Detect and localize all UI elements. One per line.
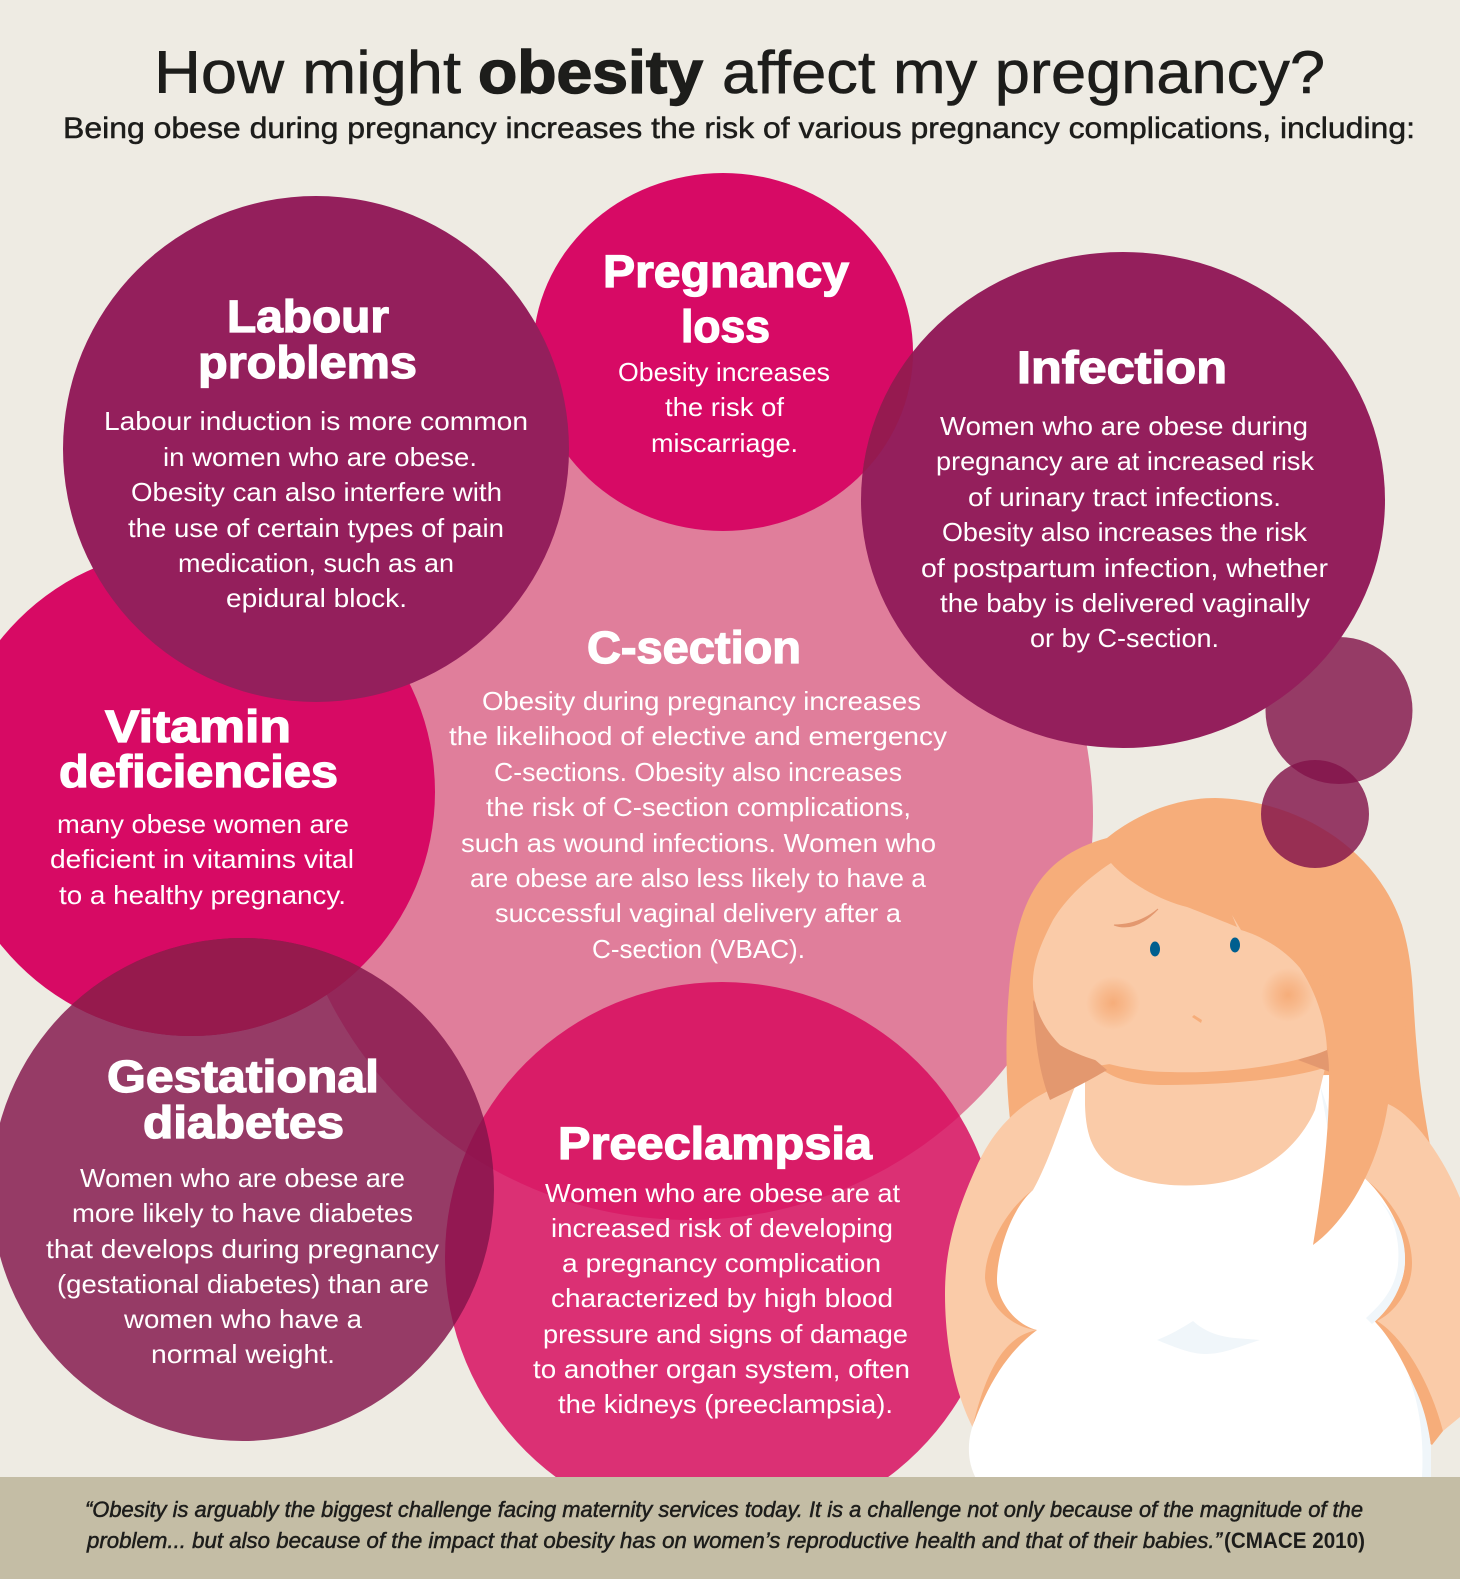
- footer quote: (CMACE 2010): [1224, 1528, 1365, 1553]
- panel: C-section: Obesity during pregnancy increases: [482, 686, 921, 716]
- panel: Gestational diabetes: women who have a: [123, 1304, 363, 1334]
- left arm: [945, 1079, 1100, 1432]
- hair back: [1006, 798, 1430, 1200]
- panel: Preeclampsia: Women who are obese are at: [545, 1178, 901, 1208]
- panel: C-section: successful vaginal delivery after a: [495, 898, 902, 928]
- panel: Gestational diabetes: Women who are obese are: [80, 1163, 405, 1193]
- title: How might: [154, 39, 461, 106]
- panel: Vitamin deficiencies: [0, 548, 435, 1036]
- panel: Pregnancy loss: Pregnancy: [603, 246, 849, 297]
- panel: Preeclampsia: to another organ system, often: [533, 1354, 910, 1384]
- panel: Labour problems: Obesity can also interfere with: [131, 477, 502, 507]
- panel: Labour problems: Labour induction is more common: [104, 406, 528, 436]
- panel: Gestational diabetes: diabetes: [143, 1097, 344, 1148]
- panel: Vitamin deficiencies: many obese women are: [57, 809, 349, 839]
- eye left: [1150, 942, 1160, 956]
- panel: Labour problems: Labour: [227, 291, 389, 342]
- panel: Infection: Infection: [1017, 342, 1227, 393]
- panel: Vitamin deficiencies: to a healthy pregnancy.: [59, 880, 346, 910]
- panel: C-section: are obese are also less likely to have a: [470, 863, 927, 893]
- panel: Infection: pregnancy are at increased risk: [936, 446, 1315, 476]
- panel: Gestational diabetes: that develops during pregnancy: [46, 1234, 439, 1264]
- panel: Preeclampsia: Preeclampsia: [558, 1118, 873, 1169]
- title: [154, 39, 1325, 106]
- panel: Labour problems: the use of certain types of pain: [128, 513, 504, 543]
- panel: Pregnancy loss: loss: [681, 301, 770, 352]
- white top: [969, 1075, 1431, 1480]
- panel: Infection: of urinary tract infections.: [968, 482, 1281, 512]
- panel: Preeclampsia: characterized by high blood: [551, 1283, 893, 1313]
- panel: C-section: such as wound infections. Women who: [461, 828, 936, 858]
- neck shadow: [1097, 1040, 1330, 1085]
- eyebrow: [1114, 909, 1158, 927]
- panel: Gestational diabetes: (gestational diabetes) than are: [57, 1269, 429, 1299]
- panel: C-section: [285, 412, 1093, 1220]
- panel: Gestational diabetes: normal weight.: [151, 1339, 335, 1369]
- panel: Preeclampsia: the kidneys (preeclampsia).: [558, 1389, 893, 1419]
- panel: Pregnancy loss: Obesity increases: [618, 357, 830, 387]
- hair shadow right: [1298, 1048, 1330, 1072]
- top shading: [1157, 1085, 1431, 1477]
- panel: Preeclampsia: pressure and signs of damage: [543, 1319, 908, 1349]
- panel: Infection: or by C-section.: [1030, 623, 1219, 653]
- panel: Gestational diabetes: [0, 938, 494, 1441]
- panel: Infection: Obesity also increases the risk: [942, 517, 1308, 547]
- panel: C-section: the risk of C-section complications,: [486, 792, 911, 822]
- panel: Vitamin deficiencies: deficient in vitamins vital: [50, 844, 354, 874]
- illustration: pregnant woman: [945, 798, 1460, 1480]
- panel: Labour problems: medication, such as an: [178, 548, 454, 578]
- footer quote: problem... but also because of the impact that obesity has on women’s reproductive health and that of their babies.”: [86, 1528, 1224, 1553]
- panel: Infection: the baby is delivered vaginally: [940, 588, 1310, 618]
- panel: Pregnancy loss: the risk of: [665, 392, 785, 422]
- panel: Vitamin deficiencies: Vitamin: [105, 701, 291, 752]
- panel: Infection: [861, 252, 1385, 748]
- panel: Vitamin deficiencies: deficiencies: [59, 746, 338, 797]
- eye right: [1230, 938, 1240, 952]
- panel: C-section: C-sections. Obesity also increases: [494, 757, 902, 787]
- panel: C-section: C-section (VBAC).: [592, 934, 805, 964]
- right body shade: [1340, 1175, 1443, 1445]
- panel: Infection: of postpartum infection, whether: [921, 553, 1328, 583]
- neck: [1085, 1060, 1327, 1185]
- panel: Labour problems: epidural block.: [226, 583, 407, 613]
- panel: Gestational diabetes: Gestational: [107, 1051, 379, 1102]
- panel: Infection: Women who are obese during: [940, 411, 1308, 441]
- thought bubble large: [1266, 637, 1412, 784]
- title: obesity: [478, 39, 704, 106]
- panel: Gestational diabetes: more likely to have diabetes: [72, 1198, 413, 1228]
- panel: C-section: the likelihood of elective and emergency: [449, 721, 947, 751]
- left body shade: [973, 1190, 1060, 1440]
- panel: Labour problems: problems: [198, 337, 417, 388]
- hair lock: [1313, 975, 1412, 1245]
- panel: Preeclampsia: [445, 982, 999, 1532]
- panel: Labour problems: in women who are obese.: [163, 442, 477, 472]
- panel: Pregnancy loss: [533, 173, 913, 531]
- face: [1033, 863, 1327, 1072]
- panel: Preeclampsia: a pregnancy complication: [562, 1248, 881, 1278]
- panel: Pregnancy loss: miscarriage.: [651, 428, 798, 458]
- thought bubble small: [1261, 760, 1369, 868]
- panel: Labour problems: [63, 196, 569, 702]
- title: affect my pregnancy?: [722, 39, 1325, 106]
- hair shadow left: [1033, 1000, 1107, 1100]
- footer quote: [0, 1477, 1460, 1579]
- subtitle: Being obese during pregnancy increases the risk of various pregnancy complications, including:: [63, 112, 1415, 145]
- panel: C-section: C-section: [587, 622, 801, 673]
- cheek right: [1261, 968, 1315, 1022]
- footer quote: “Obesity is arguably the biggest challenge facing maternity services today. It is a challenge not only because of the magnitude of the: [85, 1497, 1363, 1522]
- right arm: [1340, 1104, 1460, 1431]
- nose: [1192, 1015, 1202, 1023]
- cheek left: [1086, 976, 1140, 1030]
- panel: Preeclampsia: increased risk of developing: [551, 1213, 893, 1243]
